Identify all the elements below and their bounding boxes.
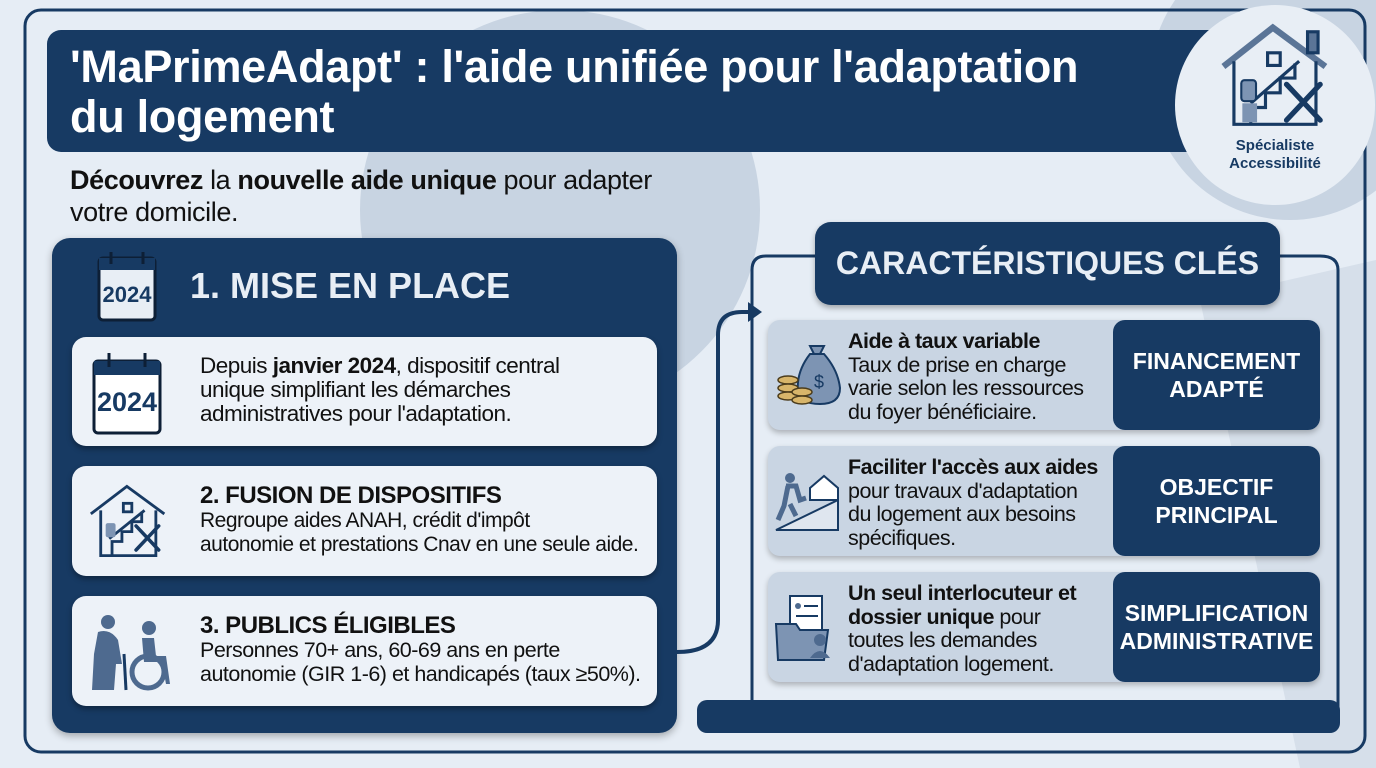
text: 3. PUBLICS ÉLIGIBLES <box>200 612 455 639</box>
text <box>848 455 1098 550</box>
icon: house with stairlift <box>1222 24 1328 126</box>
icon: money bag: $ <box>814 372 824 392</box>
icon: calendar 2024 <box>92 353 162 434</box>
badge label <box>1229 137 1321 172</box>
text: Un seul interlocuteur et <box>848 581 1076 605</box>
heading: caractéristiques clés: CARACTÉRISTIQUES CLÉS <box>836 245 1259 281</box>
title banner <box>47 30 1237 152</box>
icon: money bag <box>777 345 841 405</box>
icon: calendar 2024: 2024 <box>97 387 157 417</box>
text: spécifiques. <box>848 526 956 550</box>
text: Taux de prise en charge <box>848 352 1066 376</box>
text: varie selon les ressources <box>848 376 1084 400</box>
heading: caractéristiques clés <box>815 222 1280 305</box>
text: 2. FUSION DE DISPOSITIFS <box>200 482 501 509</box>
label <box>1113 572 1320 682</box>
bottom bar <box>697 700 1340 733</box>
text: Personnes 70+ ans, 60-69 ans en perte <box>200 638 560 662</box>
label: PRINCIPAL <box>1155 502 1278 528</box>
text: dossier unique pour <box>848 604 1040 628</box>
text: d'adaptation logement. <box>848 652 1054 676</box>
badge label: Accessibilité <box>1229 155 1321 172</box>
label: FINANCEMENT <box>1133 348 1300 374</box>
card 1 <box>72 337 657 446</box>
label: ADAPTÉ <box>1169 376 1264 402</box>
title banner: 'MaPrimeAdapt' : l'aide unifiée pour l'adaptation <box>70 41 1078 92</box>
text: toutes les demandes <box>848 628 1037 652</box>
card 2 <box>72 466 657 576</box>
text: Aide à taux variable <box>848 329 1040 353</box>
subtitle <box>70 165 652 227</box>
arrow: connector to characteristics <box>677 254 1340 707</box>
text: du logement aux besoins <box>848 502 1076 526</box>
icon: house tools <box>90 484 166 557</box>
subtitle: Découvrez la nouvelle aide unique pour adapter <box>70 165 652 195</box>
label <box>1113 320 1320 430</box>
icon: folder with document <box>774 595 830 661</box>
row 2: objectif <box>768 446 1320 556</box>
text <box>200 612 641 686</box>
icon: calendar header: 2024 <box>103 282 152 307</box>
subtitle: votre domicile. <box>70 197 238 227</box>
text: du foyer bénéficiaire. <box>848 400 1037 424</box>
text: Regroupe aides ANAH, crédit d'impôt <box>200 509 530 532</box>
badge label: Spécialiste <box>1236 137 1314 154</box>
text: pour travaux d'adaptation <box>848 478 1077 502</box>
text <box>200 353 559 426</box>
text: autonomie (GIR 1-6) et handicapés (taux ≥50%). <box>200 662 641 686</box>
title banner: du logement <box>70 91 334 142</box>
text: unique simplifiant les démarches <box>200 377 510 402</box>
label: ADMINISTRATIVE <box>1120 628 1313 654</box>
label: OBJECTIF <box>1160 474 1273 500</box>
panel: mise en place <box>52 238 677 733</box>
heading: 1. MISE EN PLACE <box>190 265 510 306</box>
label: SIMPLIFICATION <box>1125 600 1308 626</box>
row 1: financement <box>768 320 1320 430</box>
text <box>848 581 1076 676</box>
label <box>1113 446 1320 556</box>
row 3: simplification <box>768 572 1320 682</box>
text: Faciliter l'accès aux aides <box>848 455 1098 479</box>
text <box>848 329 1084 424</box>
icon: elderly and wheelchair <box>92 615 170 690</box>
text: autonomie et prestations Cnav en une seule aide. <box>200 533 638 556</box>
icon: calendar header <box>98 252 156 322</box>
text: administratives pour l'adaptation. <box>200 401 511 426</box>
text: Depuis janvier 2024, dispositif central <box>200 353 559 378</box>
icon: person climbing to house <box>776 473 839 531</box>
text <box>200 482 638 556</box>
card 3 <box>72 596 657 706</box>
badge: Spécialiste Accessibilité <box>1175 5 1375 205</box>
